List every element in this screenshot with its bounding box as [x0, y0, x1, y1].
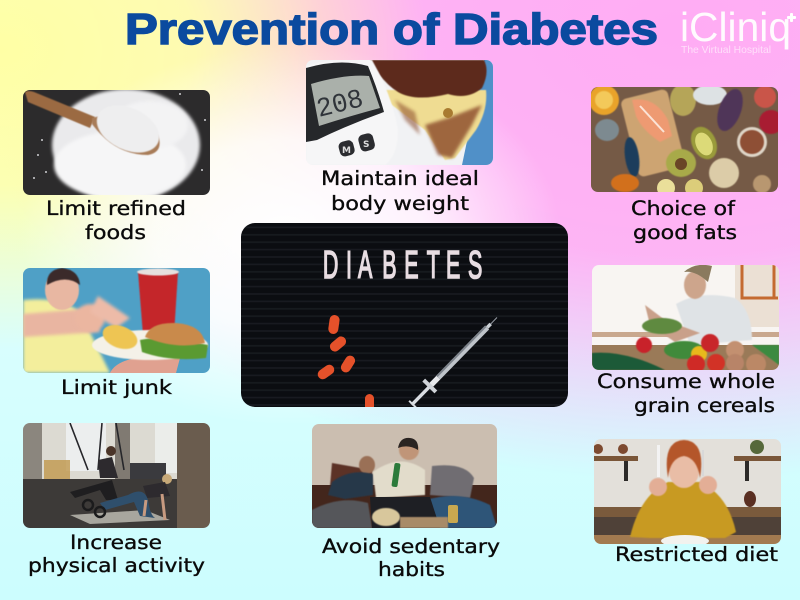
label: Choice of	[631, 197, 736, 220]
syringe	[408, 317, 498, 407]
photo: men on sofa	[312, 424, 497, 528]
title: Prevention of Diabetes	[125, 5, 658, 54]
label: Limit junk	[61, 376, 173, 399]
photo: woman refusing fast food	[23, 268, 210, 373]
logo: iCliniq: iCliniq	[680, 4, 791, 50]
photo: glucose meter and cake	[306, 59, 493, 165]
photo: woman with cutlery	[593, 439, 781, 547]
label	[46, 197, 186, 244]
photo: glucose meter and cake: M	[342, 146, 351, 156]
photo: gym workout	[23, 423, 210, 528]
photo: sugar and spoon	[23, 89, 210, 201]
panel: maintain ideal body weight	[306, 59, 493, 215]
panel: avoid sedentary habits	[312, 424, 500, 581]
label: Restricted diet	[615, 543, 778, 566]
panel: increase physical activity	[23, 423, 210, 577]
photo: glucose meter and cake: S	[363, 140, 369, 150]
label	[597, 370, 775, 417]
panel: restricted diet	[593, 439, 781, 566]
panel: limit junk	[23, 268, 210, 399]
panel: consume whole grain cereals	[592, 265, 779, 417]
label: foods	[85, 221, 146, 244]
photo: glucose meter and cake: 208	[314, 85, 367, 126]
label: good fats	[633, 221, 737, 244]
label	[321, 167, 479, 215]
label: Increase	[70, 531, 162, 554]
label	[322, 535, 500, 581]
photo: man with vegetables	[592, 265, 779, 374]
label	[28, 531, 205, 577]
label: grain cereals	[634, 394, 775, 417]
label: body weight	[331, 192, 469, 215]
label	[631, 197, 737, 244]
label: Consume whole	[597, 370, 775, 393]
label: physical activity	[28, 554, 205, 577]
label: habits	[378, 558, 445, 581]
panel: limit refined foods	[23, 89, 210, 244]
label: Maintain ideal	[321, 167, 479, 190]
photo: healthy fat foods	[591, 87, 778, 192]
letterboard word: DIABETES	[323, 243, 482, 287]
pills	[318, 315, 374, 407]
photo: central diabetes letterboard	[241, 223, 568, 414]
logo: iCliniq: The Virtual Hospital	[681, 44, 771, 56]
panel: choice of good fats	[589, 84, 783, 244]
label: Limit refined	[46, 197, 186, 220]
label: Avoid sedentary	[322, 535, 500, 558]
